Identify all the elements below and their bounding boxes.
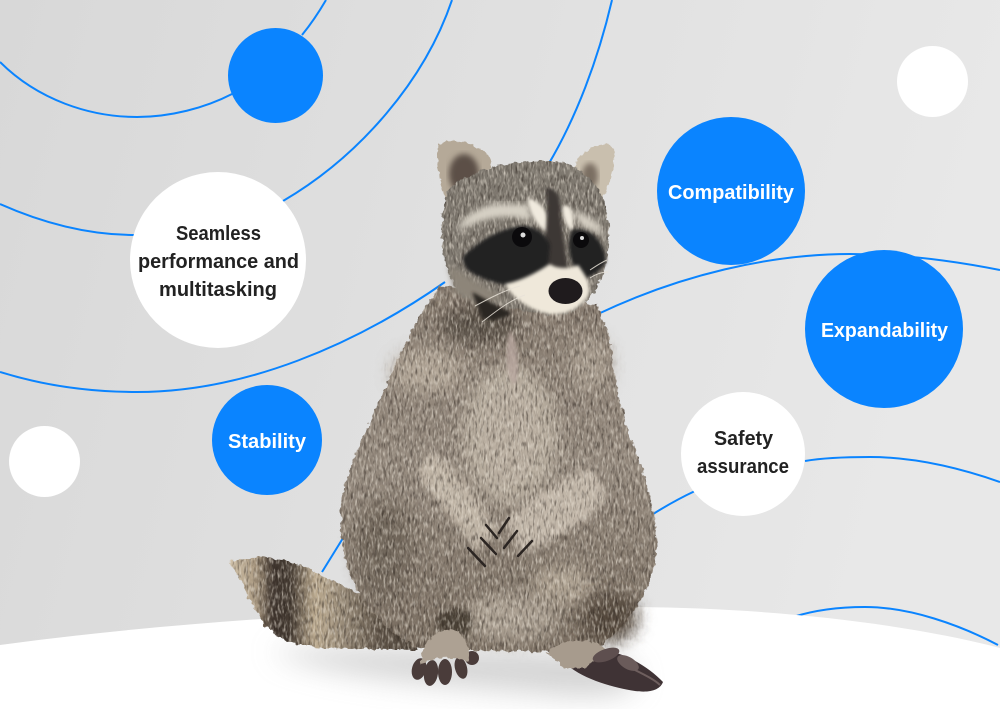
neck shadow — [440, 307, 520, 343]
between legs shadow — [437, 608, 473, 636]
raccoon body — [340, 285, 656, 652]
whiskers — [475, 260, 608, 322]
bubble: expandability — [805, 250, 963, 408]
bubble: stability: Stability — [228, 431, 307, 453]
thigh patch — [532, 565, 592, 605]
raccoon front paw — [409, 630, 479, 687]
bubble: compatibility: Compatibility — [668, 182, 795, 204]
bubble: safety assurance — [681, 392, 805, 516]
ground shadow — [270, 648, 637, 696]
shoulder highlight right — [570, 337, 610, 393]
right arm — [505, 468, 607, 554]
bubble: seamless performance and multitasking: Seamless — [176, 223, 261, 245]
left flank shadow — [357, 500, 413, 600]
bubble: safety assurance: assurance — [697, 456, 789, 478]
bubble: seamless performance and multitasking — [130, 172, 306, 348]
circle: blue accent top left — [228, 28, 323, 123]
eyebrow patches — [527, 198, 574, 232]
chest pale patch — [507, 330, 518, 385]
white ground — [0, 607, 1000, 709]
ears — [437, 141, 614, 205]
raccoon fingers — [468, 518, 532, 566]
right inner ear — [582, 163, 598, 189]
shoulder highlight left — [392, 350, 464, 394]
bubble: safety assurance: Safety — [714, 428, 774, 450]
muzzle — [505, 264, 589, 314]
cheek light — [448, 265, 505, 305]
light forehead band — [458, 204, 532, 232]
bubble: seamless performance and multitasking: multitasking — [159, 279, 277, 301]
circle: white accent top right — [897, 46, 968, 117]
bubble: stability — [212, 385, 322, 495]
bubble: seamless performance and multitasking: performance and — [138, 251, 299, 273]
head fur — [442, 161, 609, 315]
raccoon tail — [228, 557, 418, 650]
raccoon hind foot — [546, 640, 663, 692]
nose — [548, 278, 582, 304]
dark neck patch — [472, 292, 512, 320]
belly fur — [460, 594, 560, 642]
bubble: expandability: Expandability — [821, 320, 949, 342]
raccoon head — [437, 141, 614, 322]
dark nose stripe — [538, 188, 570, 280]
dark mask right — [569, 229, 606, 280]
raccoon illustration — [228, 141, 663, 692]
chest highlight — [462, 365, 558, 505]
bubble: compatibility — [657, 117, 805, 265]
left inner ear — [449, 154, 479, 194]
circle: white accent left — [9, 426, 80, 497]
eyes — [512, 227, 532, 247]
dark mask left — [462, 226, 550, 287]
right shadow — [582, 594, 638, 642]
left arm — [418, 450, 498, 550]
